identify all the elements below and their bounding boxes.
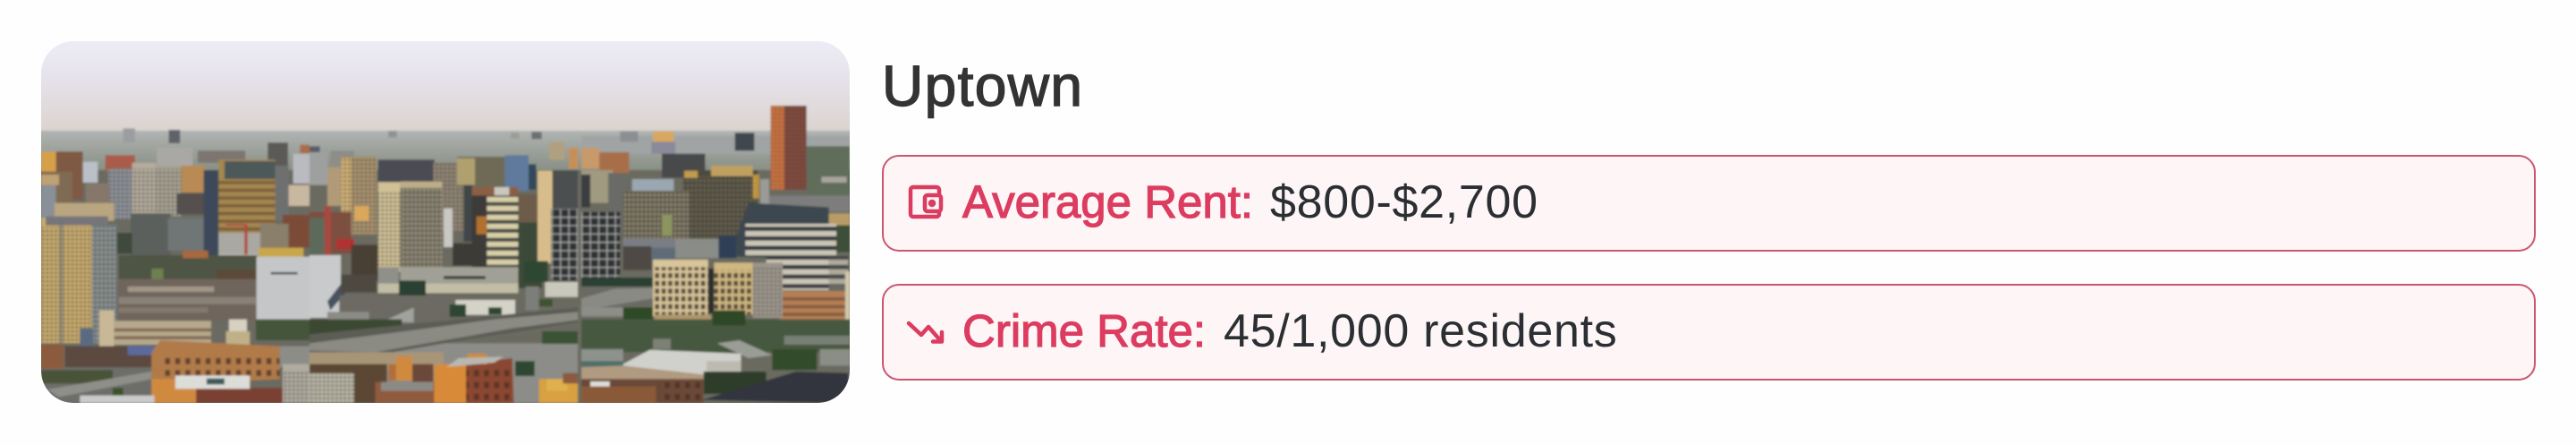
middle part of the skyline — [309, 131, 578, 403]
panel: crime rate — [883, 285, 2535, 380]
left part of the skyline — [41, 128, 310, 403]
icon: trending down arrow — [909, 323, 942, 342]
panel: average rent — [883, 156, 2535, 251]
value: rent range: $800-$2,700 — [1270, 176, 1538, 228]
right part of the skyline — [581, 106, 850, 403]
photo: Uptown skyline — [36, 36, 855, 407]
label: average rent: Average Rent: — [962, 176, 1253, 227]
title: Uptown — [882, 54, 1083, 118]
label: crime rate: Crime Rate: — [962, 305, 1206, 356]
value: crime figure: 45/1,000 residents — [1224, 305, 1617, 357]
icon: wallet — [911, 187, 941, 217]
